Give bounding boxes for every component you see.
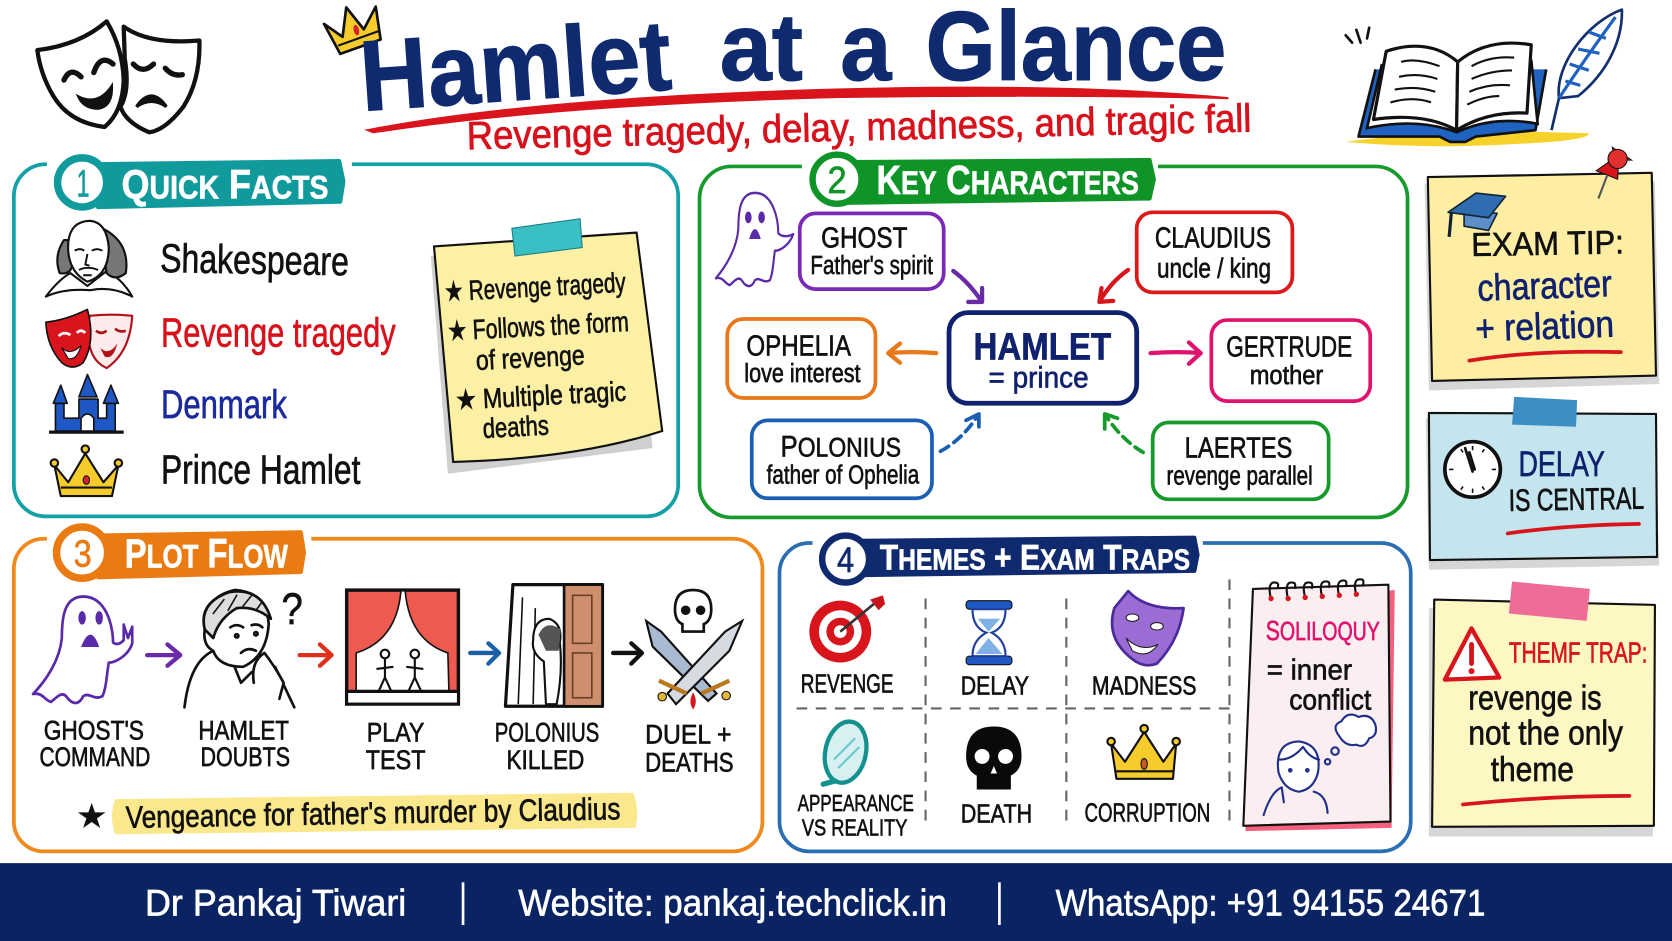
arrow: play to Polonius: [470, 643, 499, 664]
step labels: DEATHS: [645, 747, 734, 777]
box: Claudius: CLAUDIUS: [1155, 223, 1271, 255]
box: Laertes: revenge parallel: [1167, 462, 1313, 490]
box: Ghost: Father's spirit: [810, 252, 933, 280]
heading: key characters: 2: [827, 159, 847, 202]
label: Madness: MADNESS: [1092, 673, 1196, 701]
footer: Dr Pankaj Tiwari: [145, 881, 406, 923]
label: Death: DEATH: [961, 801, 1032, 829]
heading: plot flow: PLOT FLOW: [125, 531, 289, 577]
icon: graduation cap: [1448, 193, 1506, 237]
footer: [0, 863, 1672, 941]
box: Gertrude: mother: [1250, 362, 1324, 390]
box: Hamlet: [949, 313, 1137, 403]
step labels: [39, 715, 734, 777]
icon: clock: [1445, 442, 1500, 497]
note: theme trap: theme: [1491, 751, 1574, 789]
heading: themes and exam traps: [813, 536, 1203, 583]
icon: gold crown: [51, 445, 122, 496]
box: Polonius: POLONIUS: [781, 431, 901, 464]
note: revenge tragedy summary: [431, 219, 662, 474]
arrow: Polonius to duel: [613, 643, 642, 664]
box: Polonius: father of Ophelia: [767, 461, 920, 489]
box: Ghost: GHOST: [821, 223, 907, 255]
title: [356, 0, 1226, 133]
note: theme trap: [1429, 581, 1655, 836]
icon: title crown: [321, 0, 385, 56]
step labels: DOUBTS: [200, 742, 290, 772]
box: Ophelia: [727, 319, 875, 398]
icon: skull and crossed swords: [646, 590, 742, 709]
note: exam tip: + relation: [1475, 303, 1615, 349]
label: Appearance vs Reality: VS REALITY: [802, 814, 908, 840]
step labels: DUEL +: [645, 720, 731, 750]
arrow: ghost to doubts: [147, 644, 180, 666]
box: Polonius: [752, 420, 932, 498]
note: soliloquy: SOLILOQUY: [1266, 615, 1380, 646]
arrow: Ghost to Hamlet: [953, 271, 982, 302]
panel: key characters: [700, 155, 1408, 517]
icon: red masks: [46, 309, 132, 368]
icon: black skull: [966, 727, 1022, 790]
icon: corruption crown: [1107, 725, 1180, 779]
icon: ghost with hand: [33, 597, 132, 703]
step labels: HAMLET: [198, 715, 289, 745]
arrow: Laertes to Hamlet: [1105, 414, 1143, 452]
arrow: doubts to play: [300, 644, 332, 666]
icon: warning triangle: [1445, 628, 1499, 680]
label: Revenge: REVENGE: [801, 670, 894, 698]
subtitle: Revenge tragedy, delay, madness, and tragic fall: [466, 97, 1252, 158]
box: Ophelia: love interest: [744, 360, 861, 388]
callout: vengeance highlight: Vengeance for father's murder by Claudius: [125, 791, 621, 835]
box: Hamlet: = prince: [988, 361, 1089, 394]
note: exam tip: EXAM TIP:: [1471, 224, 1624, 264]
heading: plot flow: 3: [74, 533, 92, 576]
step labels: PLAY: [367, 717, 425, 747]
panel: plot flow: [14, 527, 762, 851]
step labels: KILLED: [507, 745, 584, 775]
box: Ophelia: OPHELIA: [746, 330, 852, 362]
footer: Website: pankaj.techclick.in: [518, 881, 947, 923]
note: theme trap: revenge is: [1468, 679, 1602, 717]
icon: purple mask: [1112, 591, 1184, 665]
note: revenge tragedy summary: of revenge: [475, 339, 585, 376]
text: Shakespeare: Shakespeare: [160, 235, 349, 284]
heading: themes and exam traps: THEMES + EXAM TRAPS: [880, 539, 1190, 578]
label: Appearance vs Reality: [798, 790, 914, 840]
icon: stage with curtains: [347, 590, 459, 704]
callout: vengeance highlight: ★: [77, 798, 107, 834]
text: Revenge tragedy: Revenge tragedy: [161, 310, 396, 356]
box: Claudius: uncle / king: [1157, 252, 1271, 283]
icon: target with arrow: [809, 595, 885, 663]
note: revenge tragedy summary: deaths: [482, 410, 550, 444]
heading: quick facts: [47, 156, 352, 208]
note: exam tip: [1425, 147, 1659, 390]
label: Delay: DELAY: [961, 673, 1029, 701]
box: Hamlet: HAMLET: [974, 326, 1112, 369]
icon: castle: [49, 374, 124, 432]
arrow: Hamlet to Gertrude: [1151, 342, 1201, 364]
box: Claudius: [1137, 212, 1292, 292]
text: Prince Hamlet: Prince Hamlet: [161, 446, 360, 492]
icon: open book and quill: [1346, 10, 1622, 146]
arrow: Hamlet to Ophelia: [888, 344, 936, 363]
note: revenge tragedy summary: ★ Follows the form: [447, 306, 630, 346]
step labels: TEST: [366, 745, 425, 775]
icon: Shakespeare portrait: [46, 221, 132, 297]
heading: quick facts: 1: [77, 162, 90, 205]
arrow: Polonius to Hamlet: [940, 414, 979, 451]
note: exam tip: character: [1477, 262, 1612, 309]
note: revenge tragedy summary: ★ Multiple tragic: [455, 376, 627, 416]
icon: red push pin: [1596, 147, 1631, 198]
text: question mark: ?: [282, 584, 303, 634]
label: Corruption: CORRUPTION: [1084, 800, 1210, 828]
text: Denmark: Denmark: [161, 383, 287, 427]
heading: key characters: KEY CHARACTERS: [877, 157, 1139, 203]
title underline: [368, 88, 1228, 132]
note: delay is central: DELAY: [1518, 445, 1605, 484]
box: Gertrude: [1211, 320, 1370, 401]
footer: WhatsApp: +91 94155 24671: [1056, 881, 1485, 923]
step labels: COMMAND: [39, 742, 150, 772]
note: soliloquy: = inner: [1267, 655, 1352, 687]
step labels: POLONIUS: [495, 717, 599, 747]
arrow: Claudius to Hamlet: [1099, 270, 1128, 302]
note: theme trap: not the only: [1468, 715, 1623, 753]
panel: quick facts: [14, 156, 678, 516]
heading: plot flow: [47, 527, 311, 581]
note: soliloquy: conflict: [1289, 684, 1371, 716]
icon: Hamlet thinking: [184, 590, 294, 707]
heading: themes and exam traps: 4: [837, 541, 854, 580]
box: Laertes: LAERTES: [1185, 433, 1292, 465]
box: Laertes: [1153, 422, 1329, 499]
icon: hourglass: [966, 601, 1012, 665]
box: Ghost: [800, 213, 944, 289]
title: Hamlet: [356, 0, 675, 133]
step labels: GHOST'S: [44, 715, 144, 745]
icon: door and curtain: [505, 585, 602, 706]
box: Gertrude: GERTRUDE: [1226, 331, 1352, 363]
icon: mirror: [819, 718, 872, 787]
note: revenge tragedy summary: ★ Revenge tragedy: [444, 267, 627, 307]
icon: comedy and tragedy masks: [37, 21, 199, 132]
note: delay is central: [1426, 397, 1659, 570]
note: soliloquy: [1243, 579, 1395, 831]
label: Appearance vs Reality: APPEARANCE: [798, 790, 914, 816]
heading: quick facts: QUICK FACTS: [122, 161, 328, 207]
icon: thinking person: [1264, 715, 1376, 815]
icon: ghost: [716, 193, 793, 286]
